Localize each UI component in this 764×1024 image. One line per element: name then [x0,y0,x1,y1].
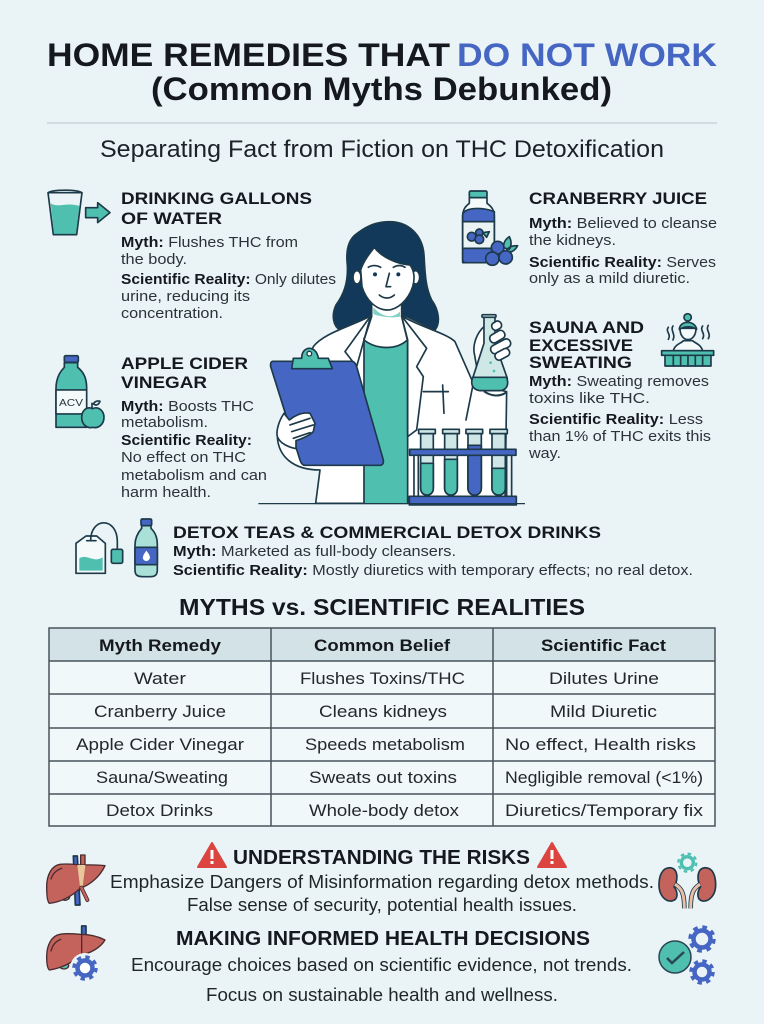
icon: liver with gear [47,926,105,983]
table row: vinegar: Apple Cider Vinegar [76,735,244,754]
table row: sauna: Negligible removal (<1%) [505,768,703,787]
panel: making informed health decisions: MAKING INFORMED HEALTH DECISIONS [176,928,590,950]
panel: sauna: EXCESSIVE [529,336,633,355]
table row: sauna: Sweats out toxins [309,768,457,787]
panel: apple cider vinegar: metabolism and can [121,468,267,484]
title: (Common Myths Debunked) [151,71,612,107]
panel: apple cider vinegar: No effect on THC [121,450,246,466]
panel: understanding the risks: Emphasize Dangers of Misinformation regarding detox methods. [110,872,654,892]
table row: vinegar [76,735,696,754]
cuff [484,391,506,395]
hair [333,222,438,330]
icon: kidneys with gear [659,854,716,908]
fingers [488,320,512,361]
table row: cranberry: Cranberry Juice [94,702,226,721]
panel: drinking water: OF WATER [121,209,222,228]
table row: cranberry: Cleans kidneys [319,702,447,721]
panel: cranberry juice: Myth: Believed to cleanse [529,216,717,232]
clipboard [271,361,383,465]
panel: drinking water: DRINKING GALLONS [121,189,312,208]
coat lapels [345,316,427,437]
panel: making informed health decisions: Encourage choices based on scientific evidence, not trends. [131,955,632,975]
icon: warning right [538,843,566,867]
panel: drinking water: concentration. [121,306,223,322]
icon: cranberry juice bottle [463,191,518,265]
icon: warning left [198,843,226,867]
ground line [258,502,525,506]
face [361,247,414,310]
icon: check and gears [659,927,714,983]
panel: apple cider vinegar: harm health. [121,485,211,501]
flask [473,317,507,378]
panel: detox teas and drinks: Myth: Marketed as full-body cleansers. [173,544,456,560]
icon: tea bag and bottle [76,519,157,577]
table row: detox drinks: Detox Drinks [106,801,213,820]
icon: ACV bottle and apple [56,356,104,428]
illustration: scientist with clipboard, flask and test tubes [258,222,525,505]
panel: apple cider vinegar [56,354,267,501]
panel: sauna: than 1% of THC exits this [529,429,711,445]
table row: sauna [96,768,703,787]
panel: cranberry juice: Scientific Reality: Serves [529,255,716,271]
panel: detox teas and drinks: Scientific Reality: Mostly diuretics with temporary effects; no real detox. [173,563,693,579]
panel: sauna: toxins like THC. [529,391,650,407]
panel: cranberry juice: the kidneys. [529,233,616,249]
table row: sauna: Sauna/Sweating [96,768,228,787]
panel: cranberry juice: CRANBERRY JUICE [529,189,707,208]
panel: drinking water: Myth: Flushes THC from [121,235,298,251]
icon: glass of water and arrow [48,190,110,235]
title: DO NOT WORK [457,37,717,73]
panel: apple cider vinegar: Scientific Reality: [121,433,252,449]
panel: making informed health decisions: Focus on sustainable health and wellness. [206,985,558,1005]
panel: detox teas and drinks [76,519,693,579]
panel: drinking water: Scientific Reality: Only dilutes [121,272,336,288]
table row: water: Flushes Toxins/THC [300,669,465,688]
table row: cranberry [94,702,658,721]
lab coat [277,316,507,503]
panel: drinking water: the body. [121,252,187,268]
table row: water: Dilutes Urine [549,669,659,688]
table row: water [134,669,659,688]
thumb holding flask [474,327,487,367]
panel: drinking water [48,189,336,322]
panel: apple cider vinegar: Myth: Boosts THC [121,399,254,415]
table row: vinegar: Speeds metabolism [305,735,465,754]
table row: detox drinks: Diuretics/Temporary fix [505,801,704,820]
panel: cranberry juice: only as a mild diuretic. [529,271,690,287]
panel: understanding the risks: UNDERSTANDING THE RISKS [233,847,530,869]
icon: liver with vessels [47,855,105,905]
table: myths vs realities [49,628,715,826]
table row: detox drinks [106,801,704,820]
panel: drinking water: urine, reducing its [121,289,250,305]
title [47,37,717,107]
table row: water: Water [134,669,186,688]
panel: detox teas and drinks: DETOX TEAS & COMMERCIAL DETOX DRINKS [173,523,601,542]
table row: detox drinks: Whole-body detox [309,801,460,820]
icon: person in sauna [662,314,714,366]
panel: sauna: SAUNA AND [529,318,644,337]
panel: cranberry juice [463,189,717,287]
panel: apple cider vinegar: metabolism. [121,415,208,431]
table header: Myth Remedy [99,636,222,655]
panel: making informed health decisions [47,926,714,1005]
panel: sauna: Myth: Sweating removes [529,374,709,390]
table header [99,636,666,655]
ears [353,271,361,284]
panel: understanding the risks: False sense of security, potential health issues. [187,895,577,915]
shirt [364,338,408,503]
panel: understanding the risks [47,843,716,915]
title: HOME REMEDIES THAT [47,37,451,73]
table header: Common Belief [314,636,450,655]
table row: cranberry: Mild Diuretic [550,702,658,721]
left hand [277,413,315,449]
table header: Scientific Fact [541,636,666,655]
panel: sauna: way. [528,446,561,462]
icon: ACV bottle and apple: ACV [59,398,83,409]
panel: apple cider vinegar: APPLE CIDER [121,354,248,373]
panel: sauna: SWEATING [529,353,632,372]
test tube rack [409,429,516,505]
subtitle: Separating Fact from Fiction on THC Detoxification [100,136,664,163]
table heading: MYTHS vs. SCIENTIFIC REALITIES [179,594,585,620]
panel: sauna [528,314,714,462]
panel: sauna: Scientific Reality: Less [529,412,703,428]
panel: apple cider vinegar: VINEGAR [121,373,207,392]
table row: vinegar: No effect, Health risks [505,735,696,754]
